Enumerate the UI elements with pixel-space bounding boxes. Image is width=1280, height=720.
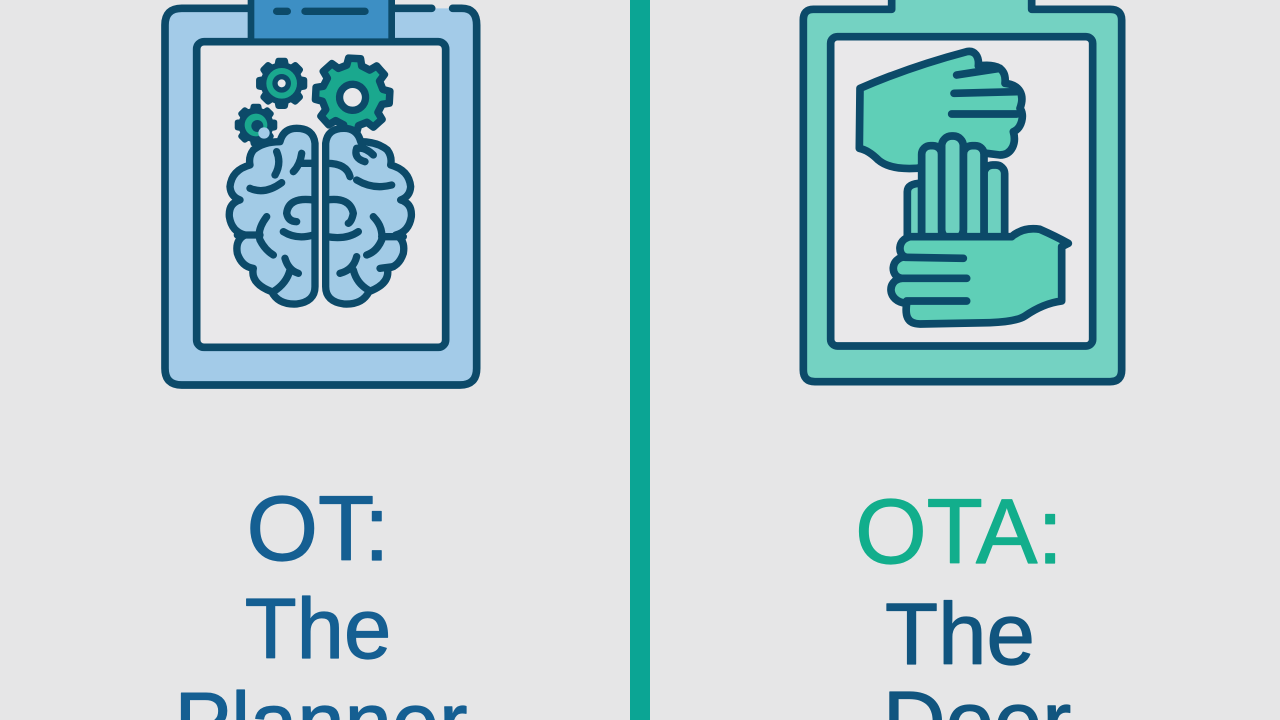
heading: OT: OT: xyxy=(246,478,390,580)
top hand xyxy=(859,51,1022,169)
right hemisphere xyxy=(326,128,411,304)
heading: OTA: OTA: xyxy=(855,481,1063,583)
icon: small gear xyxy=(259,61,304,106)
left hemisphere xyxy=(229,128,315,304)
icon: stacked hands xyxy=(859,51,1068,324)
icon: smallest gear xyxy=(238,107,274,143)
bottom hand xyxy=(891,229,1068,324)
divider xyxy=(630,0,650,720)
icon: brain xyxy=(229,128,411,304)
heading: The: The xyxy=(885,586,1035,683)
panel: OT the planner xyxy=(165,0,477,720)
icon: teal clipboard with hands xyxy=(803,0,1122,382)
clipboard board xyxy=(803,0,1122,382)
heading: The: The xyxy=(245,582,391,677)
panel: OTA the doer xyxy=(803,0,1122,720)
clipboard board xyxy=(165,8,477,385)
icon: blue clipboard with brain and gears xyxy=(165,0,477,385)
middle hand fingers xyxy=(907,136,1005,245)
icon: large gear xyxy=(314,56,392,134)
clipboard clip xyxy=(251,0,392,42)
